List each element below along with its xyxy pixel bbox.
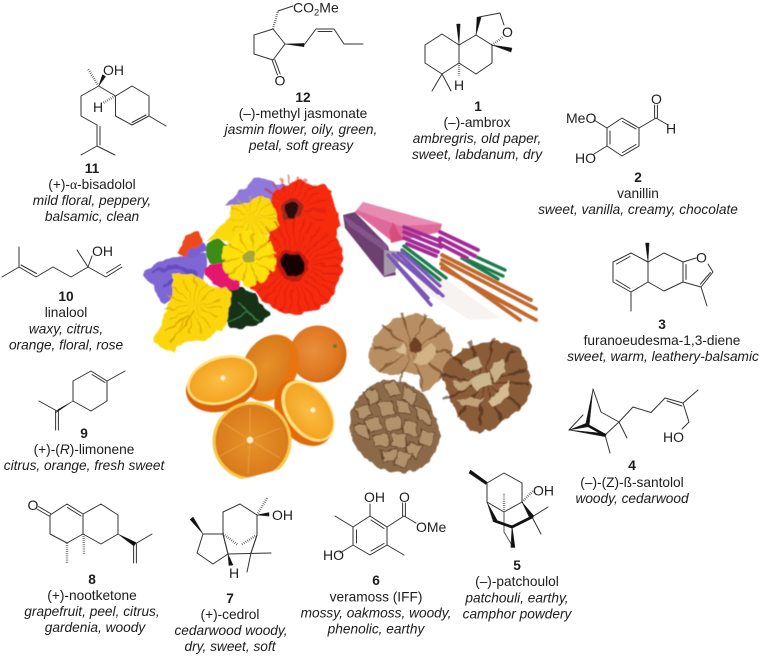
purple iris top — [224, 177, 288, 207]
right pine cone — [443, 341, 530, 432]
structure 5 — [469, 470, 548, 548]
label 8: grapefruit, peel, citrus, — [24, 604, 160, 619]
label 5: (–)-patchoulol — [475, 574, 559, 589]
compound 2: vanillin: H — [666, 120, 676, 136]
upper half orange — [230, 324, 310, 412]
compound 6: veramoss: OH — [364, 489, 385, 505]
label 8: gardenia, woody — [45, 620, 146, 635]
structure 7 — [190, 498, 271, 572]
label 12: (–)-methyl jasmonate — [239, 106, 367, 121]
compound 5: patchoulol: OH — [533, 482, 554, 498]
compound 11: bisadolol: OH — [103, 62, 124, 78]
label 8: 8 — [88, 572, 96, 587]
structure 3 — [613, 243, 713, 311]
label 10: orange, floral, rose — [9, 338, 123, 352]
structure 8 — [37, 504, 152, 564]
compound 1: ambrox: H — [454, 77, 464, 93]
label 7: cedarwood woody, — [174, 623, 288, 638]
orange sticks — [441, 255, 536, 320]
yellow daisy middle — [224, 233, 274, 283]
label 12: 12 — [295, 90, 311, 105]
label 1: 1 — [474, 99, 482, 114]
label 7: (+)-cedrol — [201, 607, 259, 622]
magenta sticks — [404, 227, 478, 258]
compound 6: veramoss: HO — [323, 547, 344, 563]
label 7: dry, sweet, soft — [184, 639, 277, 654]
label 1: (–)-ambrox — [444, 115, 511, 130]
purple box — [343, 212, 396, 277]
structure 12 — [254, 6, 363, 75]
violet sticks — [388, 252, 443, 305]
left half orange — [179, 349, 265, 421]
label 5: camphor powdery — [463, 606, 573, 622]
compound 2: vanillin — [538, 91, 738, 217]
photo: flower bouquet — [144, 177, 342, 354]
compound 7: cedrol: OH — [272, 507, 293, 523]
label 3: sweet, warm, leathery-balsamic — [567, 349, 759, 364]
bottom half orange — [212, 402, 292, 480]
photo: orange slices — [179, 324, 346, 480]
structure 1 — [425, 13, 512, 91]
pink rose — [204, 262, 241, 290]
label 8: (+)-nootketone — [47, 588, 137, 603]
label 6: 6 — [372, 573, 380, 588]
large red gerbera — [248, 216, 342, 314]
purple iris left — [144, 254, 206, 304]
compound 2: vanillin: MeO — [566, 110, 596, 126]
bottom pine cone — [350, 380, 441, 473]
label 4: 4 — [628, 458, 636, 473]
compound 10: linalool — [2, 243, 123, 352]
compound 12: methyl jasmonate — [223, 0, 377, 153]
label 6: veramoss (IFF) — [330, 590, 422, 604]
compound 4: santolol — [569, 389, 698, 506]
structure 10 — [2, 247, 122, 277]
structure 2 — [594, 105, 668, 156]
whole orange — [290, 326, 346, 382]
compound 3: furanoeudesma-1,3-diene — [567, 243, 759, 364]
shadow — [410, 275, 500, 320]
photo: incense sticks — [343, 202, 536, 320]
structure 11 — [81, 69, 166, 155]
label 3: 3 — [658, 317, 666, 332]
rear red gerbera — [272, 180, 339, 246]
compound 2: vanillin: HO — [575, 150, 596, 166]
pink box — [355, 202, 442, 242]
structure 9 — [39, 371, 125, 430]
label 7: 7 — [226, 591, 234, 606]
right half orange — [262, 369, 346, 457]
compound 3: furanoeudesma-1,3-diene: O — [696, 250, 707, 266]
label 4: woody, cedarwood — [575, 491, 689, 506]
compound 6: veramoss: O — [399, 489, 410, 505]
label 1: ambregris, old paper, — [413, 131, 541, 146]
label 2: vanillin — [617, 186, 659, 201]
label 9: citrus, orange, fresh sweet — [4, 458, 165, 473]
label 2: 2 — [634, 170, 642, 185]
label 10: linalool — [45, 305, 87, 320]
compound 6: veramoss — [301, 489, 451, 636]
label 12: jasmin flower, oily, green, — [223, 122, 377, 137]
green leaves — [205, 240, 229, 264]
compound 10: linalool: OH — [92, 243, 113, 259]
yellow chrysanthemum lower — [155, 273, 232, 354]
label 11: mild floral, peppery, — [33, 193, 151, 208]
photo: pine cones — [350, 314, 530, 473]
label 1: sweet, labdanum, dry — [412, 147, 543, 162]
compound 7: cedrol: H — [229, 565, 239, 581]
label 5: 5 — [513, 558, 521, 573]
label 6: phenolic, earthy — [327, 622, 425, 636]
compound 8: nootketone — [24, 497, 160, 635]
label 12: petal, soft greasy — [248, 138, 354, 153]
label 6: mossy, oakmoss, woody, — [301, 606, 451, 620]
label 4: (–)-(Z)-ß-santolol — [580, 475, 684, 490]
compound 11: bisadolol — [33, 62, 166, 224]
label 3: furanoeudesma-1,3-diene — [584, 333, 740, 348]
compound 4: santolol: HO — [663, 429, 684, 445]
green sticks — [402, 246, 505, 280]
compound 6: veramoss: OMe — [416, 519, 447, 535]
orange-red small flower — [178, 232, 203, 259]
label 11: balsamic, clean — [45, 209, 139, 224]
compound 12: methyl jasmonate: 2 — [314, 8, 319, 18]
compound 12: methyl jasmonate: O — [274, 72, 286, 88]
compound 1: ambrox — [412, 13, 543, 162]
top pine cone — [369, 314, 452, 392]
compound 8: nootketone: O — [28, 497, 38, 513]
compound 2: vanillin: O — [651, 91, 662, 107]
structure 6 — [335, 503, 416, 555]
yellow daisy top — [208, 196, 278, 240]
label 10: 10 — [58, 289, 74, 304]
compound 7: cedrol — [174, 498, 293, 654]
label 9: (+)-(R)-limonene — [34, 442, 134, 457]
label 11: (+)-α-bisadolol — [48, 177, 136, 192]
label 11: 11 — [85, 161, 100, 176]
label 9: 9 — [80, 426, 88, 441]
label 10: waxy, citrus, — [29, 322, 103, 336]
label 5: patchouli, earthy, — [464, 590, 569, 606]
compound 1: ambrox: O — [502, 24, 513, 40]
compound 5: patchoulol — [463, 470, 573, 622]
label 2: sweet, vanilla, creamy, chocolate — [538, 202, 738, 217]
structure 4 — [569, 389, 698, 453]
compound 9: limonene — [4, 371, 165, 473]
compound 11: bisadolol: H — [93, 99, 103, 115]
